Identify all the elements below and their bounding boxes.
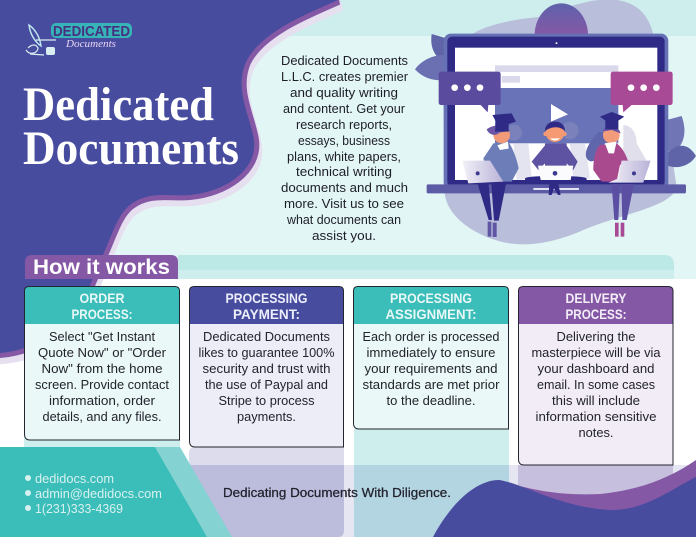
intro text block: Dedicated Documents xyxy=(281,53,408,68)
card: processing assignment xyxy=(354,286,508,429)
logo xyxy=(26,23,132,55)
section heading band xyxy=(178,255,674,279)
left leaves xyxy=(415,34,450,80)
footer teal shape with contact details xyxy=(0,447,232,537)
title: Dedicated xyxy=(23,78,214,131)
card: processing assignment: to the deadline. xyxy=(386,393,476,408)
card: delivery process: DELIVERY xyxy=(566,290,627,306)
card: processing payment: Dedicated Documents xyxy=(203,329,330,344)
card: delivery process: Delivering the xyxy=(556,329,636,344)
student middle xyxy=(525,121,590,195)
footer teal shape with contact details: admin@dedidocs.com xyxy=(35,486,162,501)
title: Documents xyxy=(23,122,239,175)
intro text block: technical writing xyxy=(296,164,392,179)
card: order process: Now" from the home xyxy=(42,361,162,376)
card: order process xyxy=(24,286,180,440)
card: processing assignment: PROCESSING xyxy=(390,290,472,306)
card: delivery process: your dashboard and xyxy=(538,361,654,376)
card: delivery process: masterpiece will be via xyxy=(532,345,661,360)
illustration: students on laptop xyxy=(415,0,696,244)
card: delivery process: PROCESS: xyxy=(566,306,626,322)
footer teal shape with contact details: dedidocs.com xyxy=(35,471,114,486)
card: order process: details, and any files. xyxy=(42,409,162,424)
card: processing payment: likes to guarantee 100% xyxy=(198,345,335,360)
card: delivery process: information sensitive xyxy=(536,409,656,424)
card: processing payment: Stripe to process xyxy=(218,393,315,408)
card: processing assignment: your requirements and xyxy=(364,361,498,376)
heading: How it works: How it works xyxy=(33,255,170,279)
footer teal shape with contact details: 1(231)333-4369 xyxy=(35,501,123,516)
card: processing payment: security and trust with xyxy=(202,361,330,376)
title xyxy=(23,78,239,175)
intro text block: and content. Get your xyxy=(283,101,406,116)
speech bubble left xyxy=(439,72,501,112)
card: processing payment: PAYMENT: xyxy=(233,306,300,322)
card: processing payment: payments. xyxy=(237,409,296,424)
card: delivery process xyxy=(518,286,673,465)
background: header panel xyxy=(0,0,696,279)
intro text block: more. Visit us to see xyxy=(284,196,404,211)
intro text block: and quality writing xyxy=(290,85,398,100)
card: order process: Quote Now" or "Order xyxy=(38,345,167,360)
student right xyxy=(586,112,651,237)
intro text block: essays, business xyxy=(298,133,390,148)
illustration backdrop blob xyxy=(443,0,677,244)
purple half circle xyxy=(535,3,588,35)
card: processing payment: the use of Paypal and xyxy=(205,377,328,392)
card: delivery process: notes. xyxy=(578,425,614,440)
card: delivery process: this will include xyxy=(552,393,640,408)
card: processing assignment: ASSIGNMENT: xyxy=(386,306,476,322)
speech bubble right xyxy=(611,72,673,112)
card: processing payment: PROCESSING xyxy=(226,290,308,306)
card: processing payment xyxy=(190,286,344,447)
intro text block: plans, white papers, xyxy=(287,149,401,164)
card: order process: ORDER xyxy=(80,290,124,306)
bottom right waves xyxy=(433,460,696,537)
card: order process: PROCESS: xyxy=(72,306,132,322)
intro text block xyxy=(281,53,409,243)
card: processing assignment: immediately to ensure xyxy=(366,345,496,360)
tagline: Dedicating Documents With Diligence. xyxy=(223,485,451,500)
student left xyxy=(462,113,532,237)
intro text block: documents and much xyxy=(281,180,408,195)
card: order process: information, order xyxy=(49,393,156,408)
logo: DEDICATED xyxy=(53,24,130,40)
laptop xyxy=(427,34,686,193)
intro text block: assist you. xyxy=(312,228,376,243)
right leaves xyxy=(667,116,696,167)
card: delivery process: email. In some cases xyxy=(537,377,655,392)
card: processing assignment: Each order is processed xyxy=(362,329,500,344)
card: order process: Select "Get Instant xyxy=(49,329,155,344)
intro text block: what documents can xyxy=(286,212,401,227)
logo: Documents xyxy=(65,38,116,50)
card: processing assignment: standards are met prior xyxy=(362,377,500,392)
card: order process: screen. Provide contact xyxy=(35,377,169,392)
footer band xyxy=(0,429,696,537)
intro text block: research reports, xyxy=(296,117,392,132)
background: blue wave with purple edge xyxy=(0,0,341,359)
intro text block: L.L.C. creates premier xyxy=(281,69,409,84)
